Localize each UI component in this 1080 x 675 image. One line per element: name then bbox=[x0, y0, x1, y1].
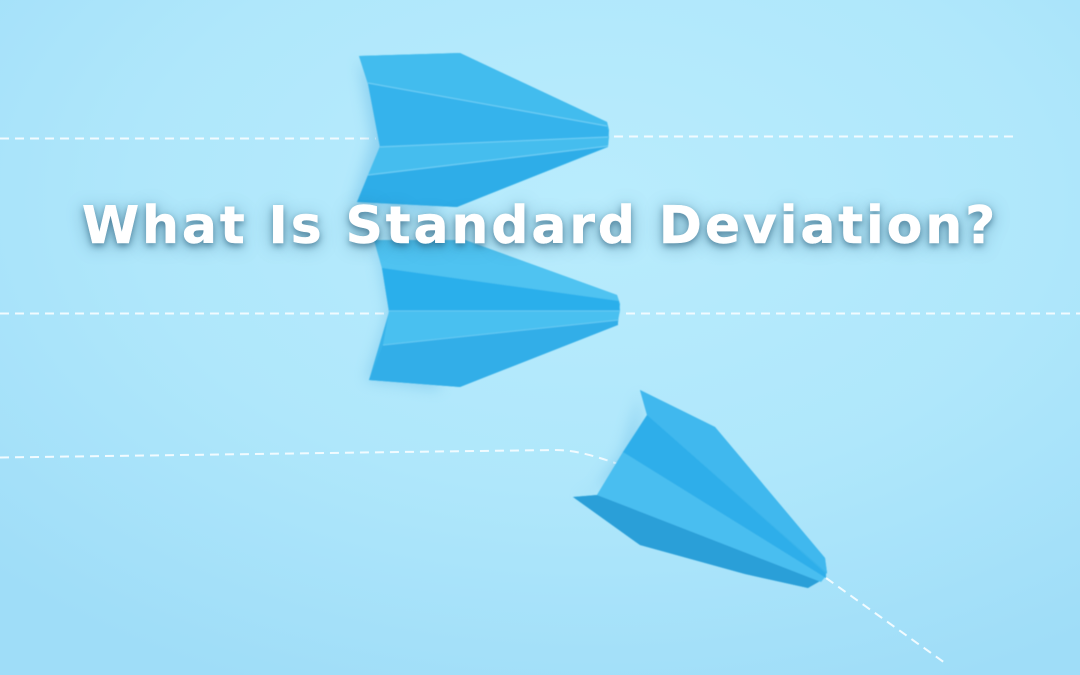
flight path: deviating line bbox=[0, 450, 945, 663]
flight path: top line bbox=[0, 136, 1015, 138]
paper plane: deviating bbox=[573, 390, 827, 588]
title: What Is Standard Deviation? bbox=[82, 196, 998, 256]
paper plane: middle bbox=[366, 240, 620, 390]
paper plane: top bbox=[352, 53, 609, 214]
flight path: middle line bbox=[0, 312, 1080, 314]
